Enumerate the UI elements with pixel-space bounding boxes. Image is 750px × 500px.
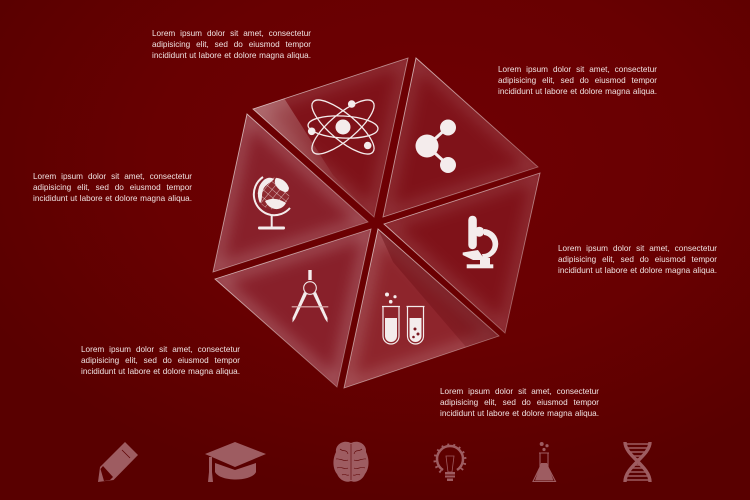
text block: top left: Lorem ipsum dolor sit amet, consectetur — [152, 29, 311, 38]
icon: DNA helix — [625, 442, 650, 482]
text block: bottom left: incididunt ut labore et dolore magna aliqua. — [81, 367, 240, 376]
segment: test tubes — [344, 229, 499, 388]
segment: molecule — [383, 58, 538, 217]
bottom icon row — [98, 442, 650, 482]
icon: light bulb — [435, 445, 465, 481]
text block: left — [33, 172, 192, 203]
icon: molecule — [416, 120, 456, 173]
segment: compass — [215, 229, 371, 387]
text block: right: incididunt ut labore et dolore magna aliqua. — [558, 266, 717, 275]
text block: left: Lorem ipsum dolor sit amet, consectetur — [33, 172, 192, 181]
text block: top right: incididunt ut labore et dolore magna aliqua. — [498, 87, 657, 96]
text block: bottom left: Lorem ipsum dolor sit amet, consectetur — [81, 345, 240, 354]
hexagon: glass segments — [213, 58, 540, 388]
segment: microscope — [384, 173, 540, 333]
text block: bottom right: adipisicing elit, sed do eiusmod tempor — [440, 398, 599, 407]
text block: right: adipisicing elit, sed do eiusmod tempor — [558, 255, 717, 264]
text block: bottom right: Lorem ipsum dolor sit amet, consectetur — [440, 387, 599, 396]
text block: right: Lorem ipsum dolor sit amet, consectetur — [558, 244, 717, 253]
icon: microscope — [463, 216, 498, 268]
icon: brain — [333, 442, 369, 482]
icon: test tubes — [382, 292, 424, 344]
icon: drawing compass — [292, 270, 328, 322]
icon: globe — [254, 177, 290, 230]
text block: top left: incididunt ut labore et dolore magna aliqua. — [152, 51, 311, 60]
text block: left: incididunt ut labore et dolore magna aliqua. — [33, 194, 192, 203]
text block: top left — [152, 29, 311, 60]
text block: top right: adipisicing elit, sed do eiusmod tempor — [498, 76, 657, 85]
icon: atom — [305, 92, 381, 162]
text block: bottom right — [440, 387, 599, 418]
text block: right — [558, 244, 717, 275]
text block: bottom right: incididunt ut labore et dolore magna aliqua. — [440, 409, 599, 418]
text block: left: adipisicing elit, sed do eiusmod tempor — [33, 183, 192, 192]
text block: bottom left: adipisicing elit, sed do eiusmod tempor — [81, 356, 240, 365]
segment: atom — [253, 58, 408, 217]
text block: bottom left — [81, 345, 240, 376]
text block: top right: Lorem ipsum dolor sit amet, consectetur — [498, 65, 657, 74]
segment: globe — [213, 114, 368, 272]
icon: graduation cap — [205, 442, 266, 482]
icon: flask — [533, 442, 556, 482]
icon: pencil — [98, 442, 138, 482]
text block: top left: adipisicing elit, sed do eiusmod tempor — [152, 40, 311, 49]
text block: top right — [498, 65, 657, 96]
